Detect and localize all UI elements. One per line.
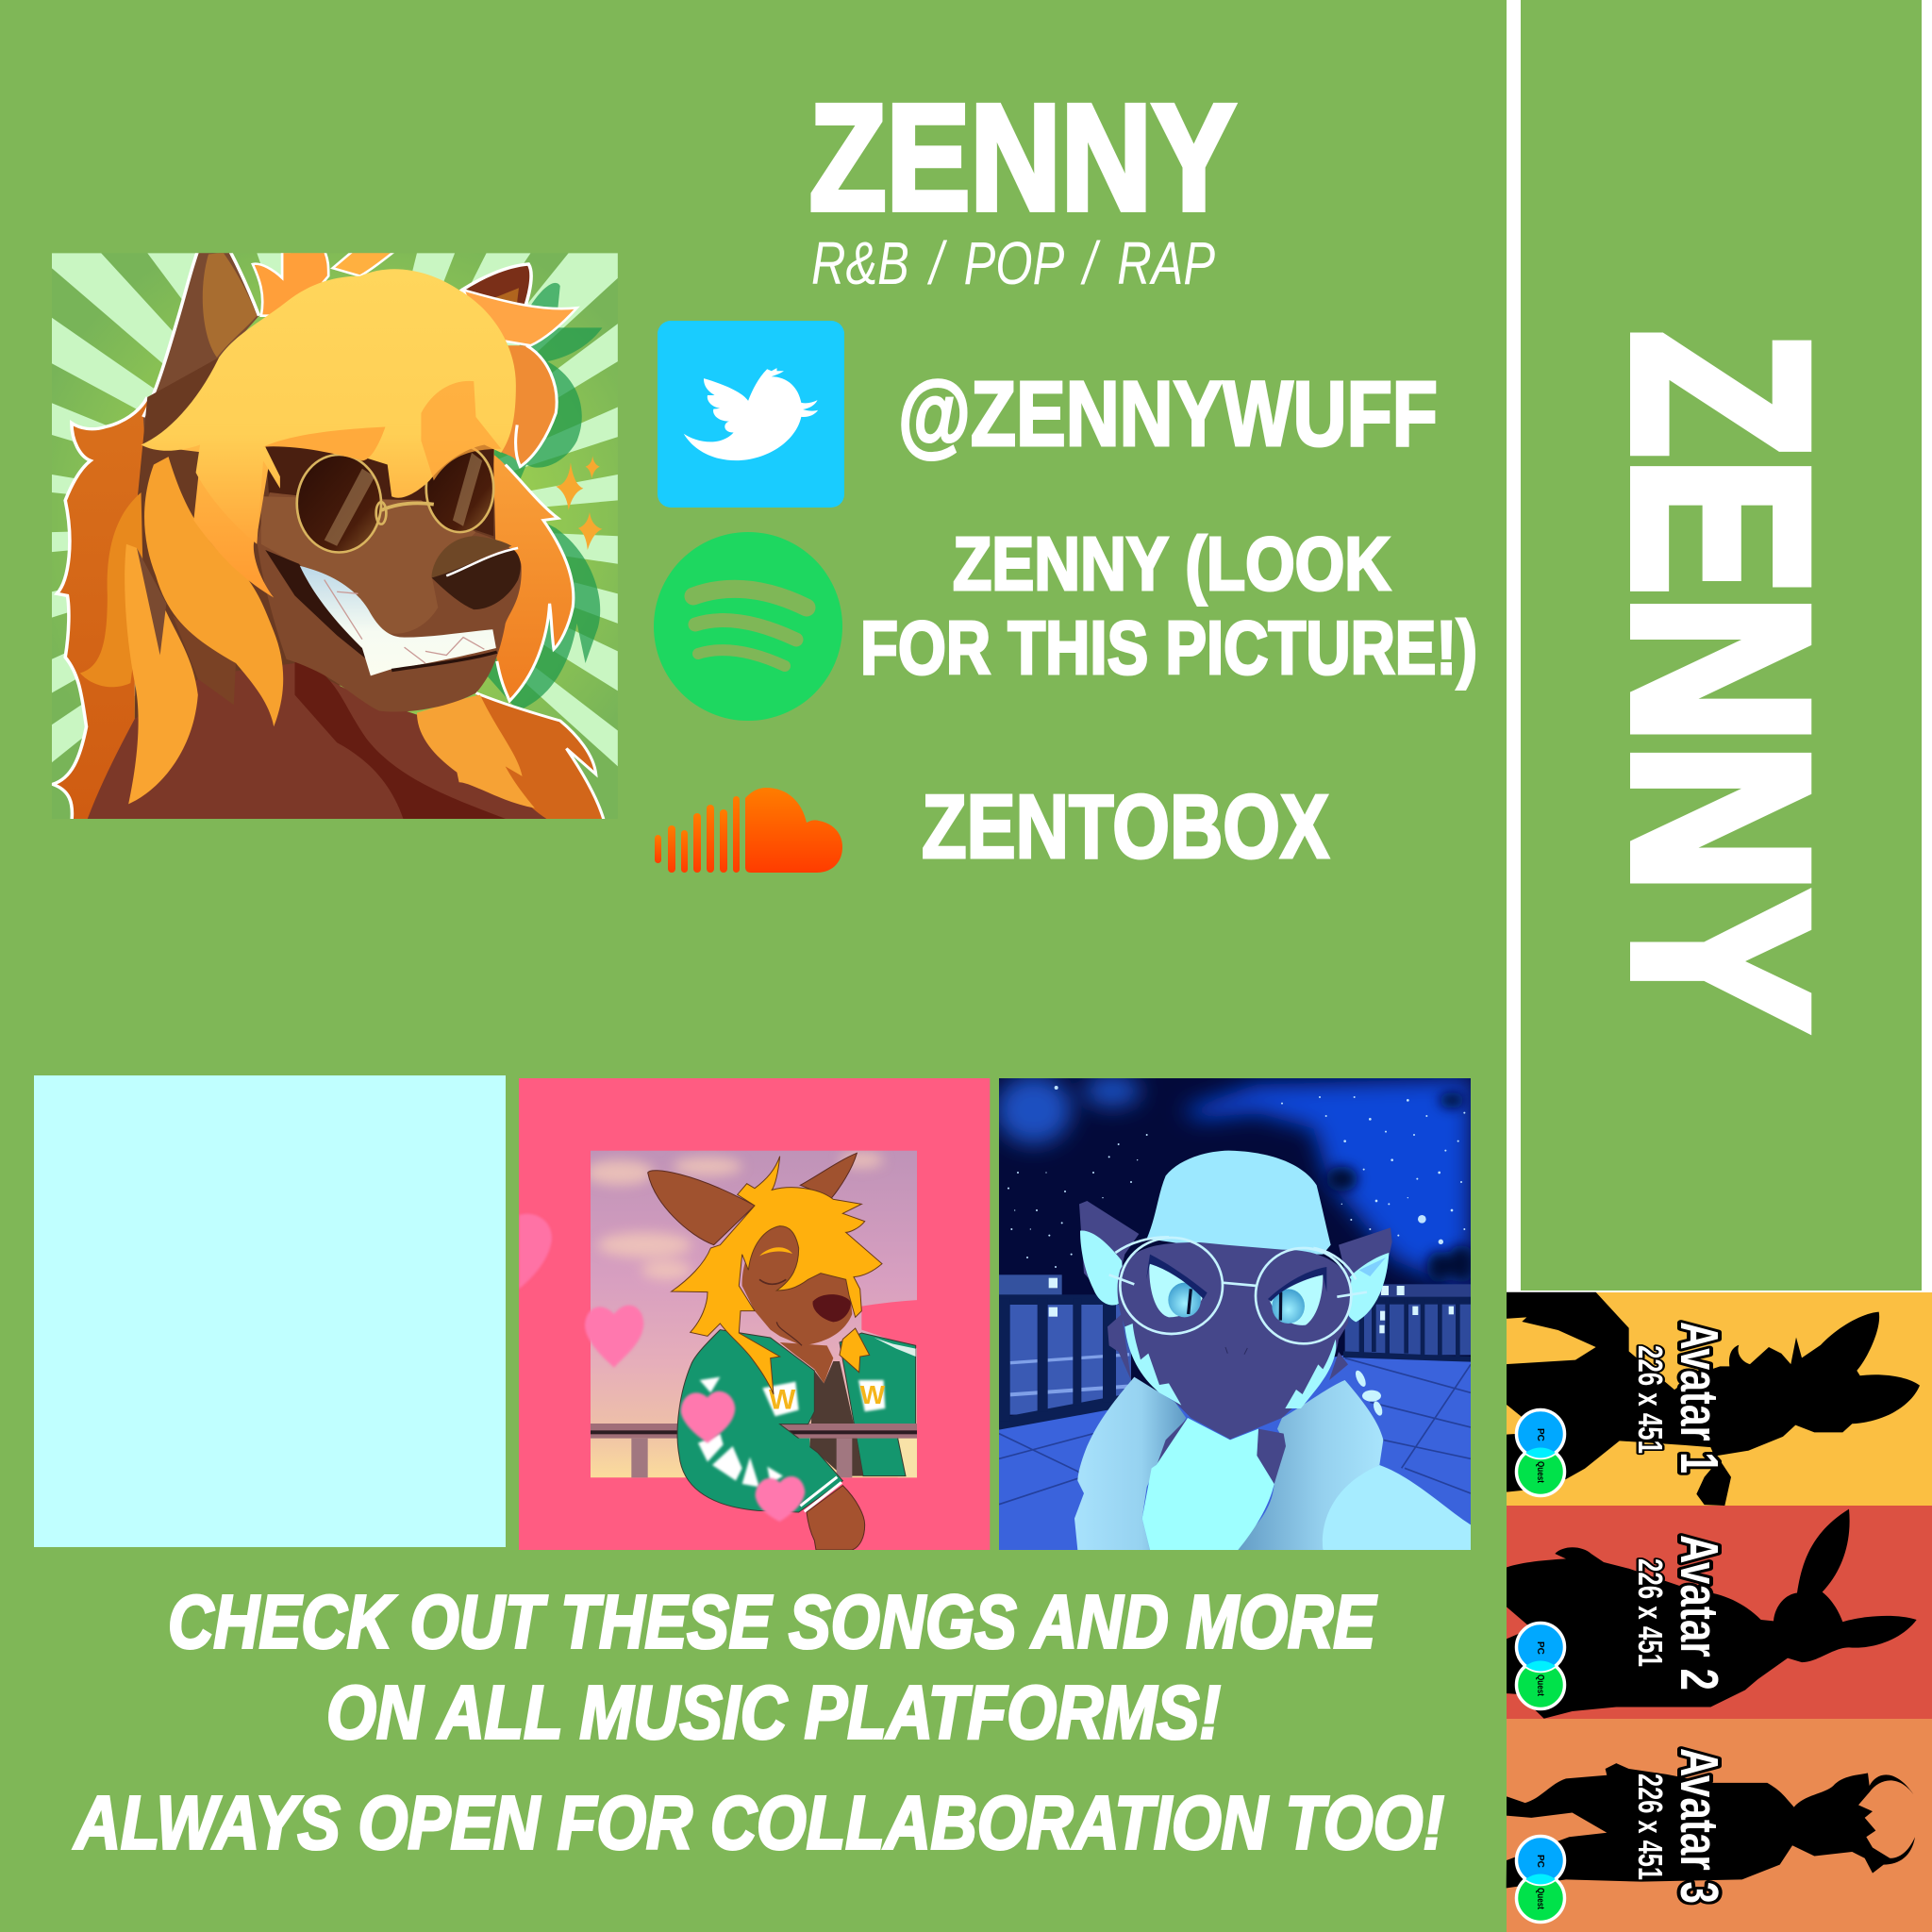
avatar 2 label: Avatar 2	[1669, 1535, 1729, 1690]
platform badges 1	[1517, 1409, 1564, 1496]
spotify name: FOR THIS PICTURE!)	[860, 606, 1477, 690]
platform badges 1: Quest	[1535, 1461, 1545, 1484]
hat	[1147, 1151, 1331, 1255]
avatar 2 size: 226 x 451	[1631, 1558, 1670, 1667]
silhouette 2	[1507, 1509, 1917, 1719]
twitter handle: @ZENNYWUFF	[898, 362, 1438, 465]
side panel: vertical name banner	[1507, 0, 1932, 1292]
long hair locks	[80, 457, 283, 804]
face	[1118, 1242, 1351, 1440]
icon: spotify	[654, 532, 842, 721]
panel: light blue square	[34, 1075, 506, 1547]
platform badges 3: PC	[1535, 1855, 1545, 1868]
hair bangs	[142, 269, 516, 598]
bottom callout text: ON ALL MUSIC PLATFORMS!	[326, 1670, 1221, 1755]
portrait background sunburst	[52, 253, 618, 819]
spotify name	[860, 522, 1477, 690]
character shadow	[475, 283, 602, 710]
right ear	[458, 262, 533, 304]
title: ZENNY	[809, 73, 1236, 242]
genres: R&B / POP / RAP	[811, 229, 1215, 297]
lower right hair	[417, 693, 605, 822]
platform badges 2	[1517, 1623, 1564, 1709]
jacket letters: W	[769, 1385, 796, 1416]
sunset sky picture	[585, 1151, 920, 1477]
neck	[173, 615, 236, 705]
avatar card 3	[1507, 1719, 1932, 1932]
soundcloud name: ZENTOBOX	[922, 776, 1329, 877]
glasses	[297, 444, 493, 553]
arm	[807, 1486, 865, 1550]
avatar 1 size: 226 x 451	[1631, 1345, 1670, 1454]
panel: portrait illustration	[52, 250, 618, 822]
hearts	[519, 1214, 805, 1522]
avatar 3 size: 226 x 451	[1631, 1774, 1670, 1880]
head base fill	[135, 358, 497, 719]
bottom callout text: ALWAYS OPEN FOR COLLABORATION TOO!	[73, 1781, 1444, 1864]
bottom callout text	[73, 1579, 1444, 1864]
platform badges 2: Quest	[1535, 1674, 1545, 1697]
eyes	[1146, 1255, 1326, 1325]
avatar card 2	[1507, 1506, 1932, 1719]
platform badges 3	[1517, 1836, 1564, 1923]
jacket sleeve	[677, 1330, 885, 1512]
head	[257, 492, 522, 712]
nose	[432, 536, 521, 609]
sparkles	[556, 456, 602, 550]
left ear	[142, 253, 260, 432]
panel: avatar photo at night	[996, 1075, 1475, 1550]
icon: twitter	[658, 321, 844, 508]
balcony floor	[999, 1355, 1471, 1550]
panel: pink song cover	[519, 1078, 991, 1550]
character ears	[648, 1153, 857, 1245]
top hair tufts	[253, 250, 396, 316]
silhouette 3	[1507, 1763, 1915, 1888]
city and road	[999, 1274, 1471, 1415]
body	[87, 662, 547, 819]
face	[742, 1226, 852, 1383]
fence	[591, 1424, 917, 1477]
silhouette 1	[1507, 1292, 1920, 1506]
bottom callout text: CHECK OUT THESE SONGS AND MORE	[168, 1579, 1377, 1664]
platform badges 3: Quest	[1535, 1888, 1545, 1910]
shirt and jacket front	[809, 1333, 916, 1476]
ears	[1079, 1201, 1392, 1380]
railing	[999, 1294, 1471, 1430]
right hair spikes	[463, 290, 577, 701]
round glasses	[1109, 1237, 1367, 1343]
night sky	[999, 1078, 1471, 1416]
platform badges 1: PC	[1535, 1428, 1545, 1441]
icon: soundcloud	[655, 788, 842, 873]
hair clip flower	[1354, 1369, 1384, 1417]
avatar card 1	[1507, 1292, 1932, 1506]
hair	[672, 1157, 882, 1394]
platform badges 2: PC	[1535, 1641, 1545, 1655]
twitter bird	[684, 368, 818, 460]
avatar 1 label: Avatar 1	[1669, 1322, 1729, 1474]
vertical name: ZENNY	[1583, 331, 1859, 1030]
mouth and teeth	[265, 550, 497, 675]
spotify name: ZENNY (LOOK	[953, 522, 1391, 606]
coat	[1074, 1377, 1471, 1550]
back hair left	[53, 397, 147, 822]
jacket letters: W	[860, 1380, 886, 1409]
jacket letters	[769, 1386, 885, 1409]
